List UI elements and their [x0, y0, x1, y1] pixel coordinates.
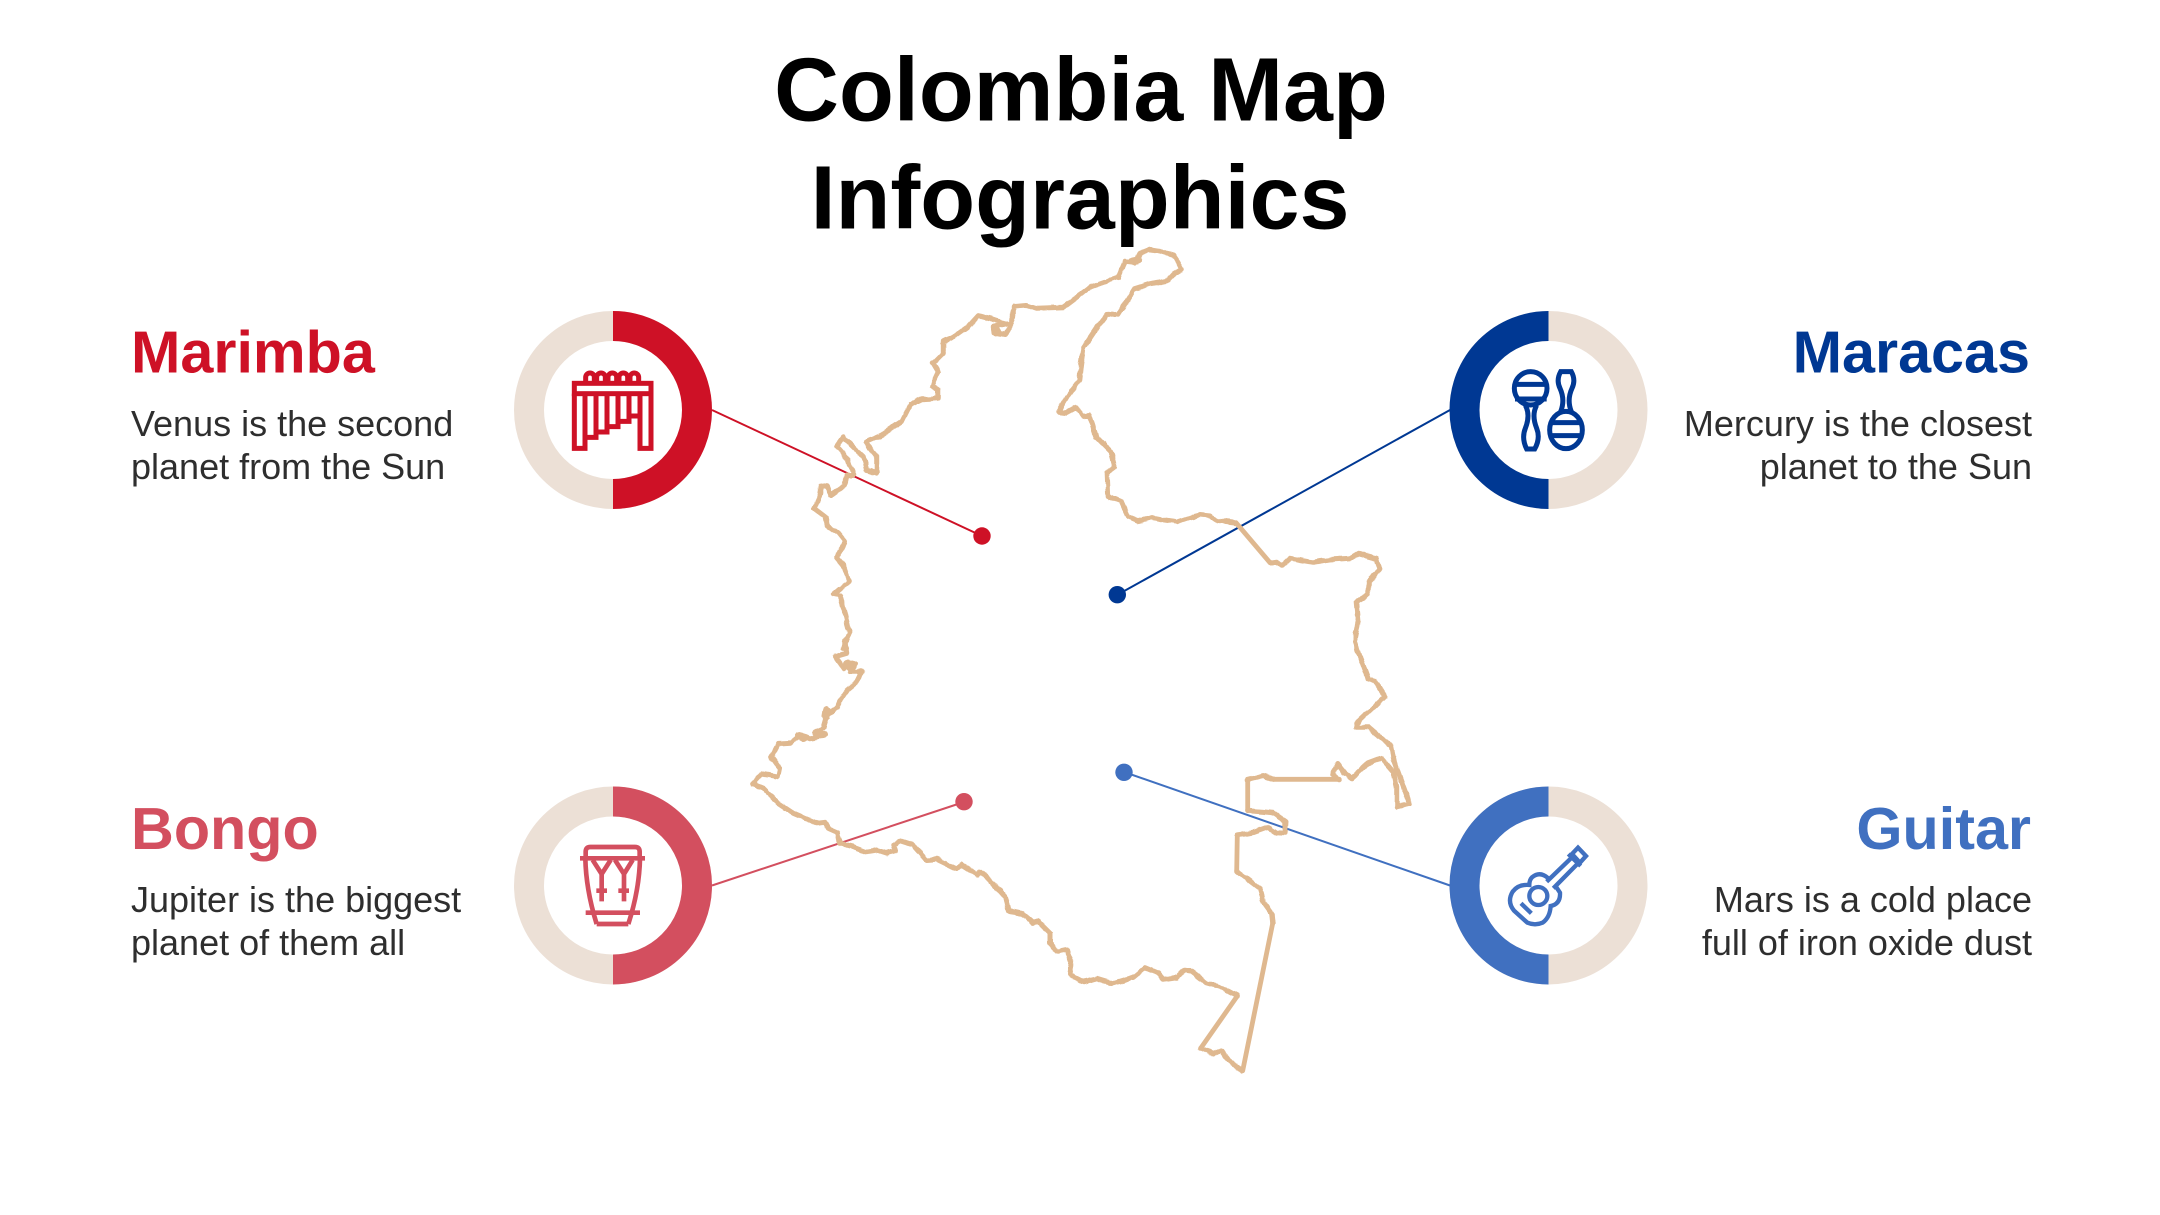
text: Marimba description: planet from the Sun — [131, 446, 445, 487]
icon: maracas — [1514, 372, 1582, 449]
text: Marimba description: Venus is the second — [131, 403, 453, 444]
icon: marimba — [574, 373, 651, 448]
icon: guitar — [1510, 848, 1586, 924]
icon: bongo — [580, 847, 645, 924]
heading: Marimba: Marimba — [131, 318, 376, 386]
heading: Bongo: Bongo — [131, 795, 319, 862]
connector line: Maracas — [1117, 410, 1450, 595]
map point: Guitar — [1115, 764, 1133, 781]
map point: Bongo — [955, 793, 973, 810]
donut: Guitar — [1464, 802, 1632, 970]
title: Colombia Map — [774, 40, 1388, 140]
text: Bongo description: planet of them all — [131, 922, 405, 963]
donut: Bongo — [529, 802, 697, 970]
connector line: Bongo — [712, 802, 964, 886]
heading: Guitar: Guitar — [1856, 795, 2031, 862]
panel: Marimba — [131, 318, 697, 494]
donut: Marimba — [529, 326, 697, 494]
text: Guitar description: full of iron oxide dust — [1702, 922, 2032, 963]
title — [774, 40, 1388, 248]
map point: Maracas — [1109, 586, 1126, 603]
title: Infographics — [811, 148, 1349, 248]
text: Guitar description: Mars is a cold place — [1714, 879, 2032, 920]
heading: Maracas: Maracas — [1793, 318, 2030, 386]
connector line: Guitar — [1124, 772, 1450, 886]
map point: Marimba — [973, 527, 991, 545]
donut: Maracas — [1464, 326, 1632, 494]
text: Maracas description: Mercury is the closest — [1684, 403, 2032, 444]
panel: Maracas — [1464, 318, 2032, 494]
panel: Guitar — [1464, 795, 2032, 970]
map of Colombia outline — [753, 249, 1408, 1071]
text: Maracas description: planet to the Sun — [1760, 446, 2032, 487]
panel: Bongo — [131, 795, 697, 970]
text: Bongo description: Jupiter is the biggest — [131, 879, 461, 920]
connector line: Marimba — [712, 410, 982, 536]
